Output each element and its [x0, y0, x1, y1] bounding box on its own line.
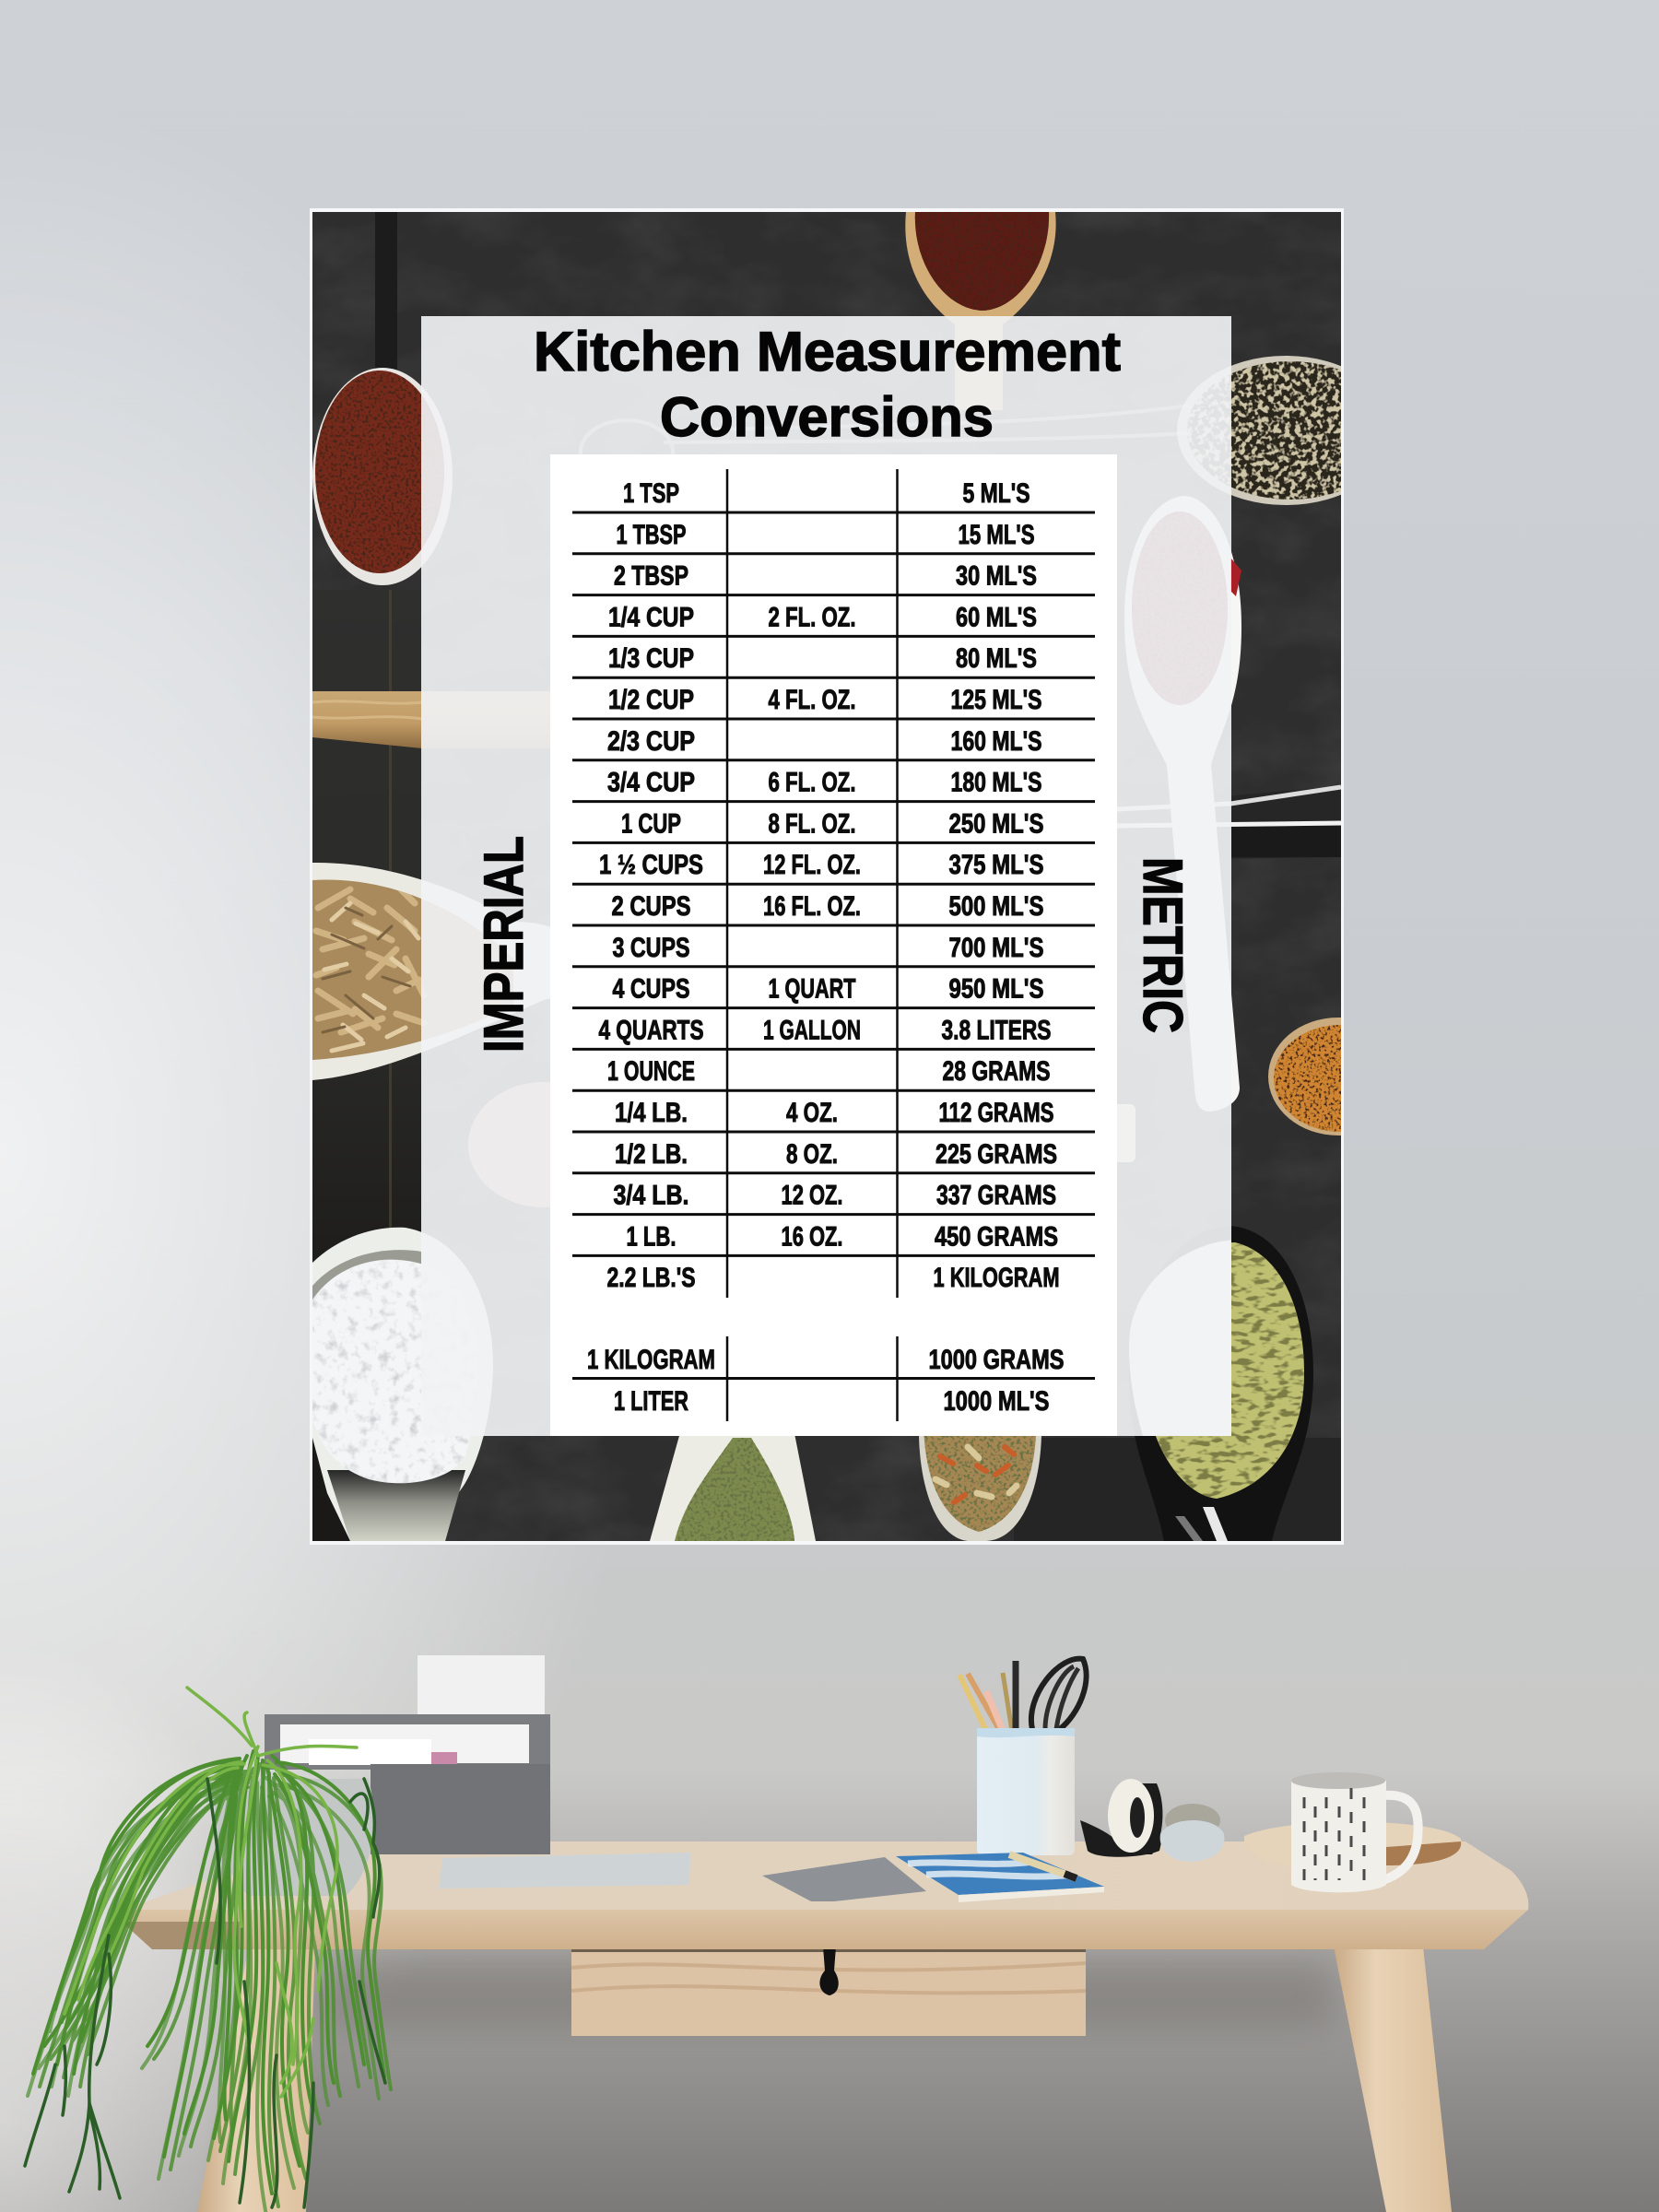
icon: plant pot: [215, 1779, 374, 1896]
conversion table: imperial column: 1/2 LB.: [615, 1139, 688, 1170]
conversion table: imperial column: [587, 478, 715, 1417]
conversion table: metric column: 950 ML'S: [949, 974, 1043, 1005]
conversion table: middle column: 8 FL. OZ.: [769, 808, 855, 839]
conversion table: middle column: 12 OZ.: [782, 1181, 842, 1211]
desk top surface: [122, 1841, 1528, 1910]
conversion table: metric column: 60 ML'S: [956, 602, 1037, 632]
icon: pen cup with pencils and scissors: [959, 1659, 1087, 1855]
conversion table: metric column: 112 GRAMS: [938, 1098, 1054, 1128]
title: [534, 321, 1121, 448]
icon: speckled mug: [1291, 1772, 1418, 1892]
conversion table: middle column: 6 FL. OZ.: [769, 768, 855, 798]
conversion table: imperial column: 2 CUPS: [612, 891, 691, 922]
icon: red chilli sliver: [1230, 558, 1241, 596]
desk: [122, 1841, 1528, 2212]
conversion table: imperial column: 2 TBSP: [614, 561, 688, 592]
conversion table: metric column: 250 ML'S: [949, 808, 1043, 839]
icon: wooden spoon, top: [905, 212, 1056, 410]
icon: glass paperweight: [1160, 1804, 1224, 1862]
conversion table: metric column: 28 GRAMS: [942, 1056, 1051, 1087]
conversion table: middle column: 4 OZ.: [786, 1098, 838, 1128]
icon: pink salt bowl behind panel: [468, 1082, 550, 1207]
conversion table: middle column: 12 FL. OZ.: [763, 850, 861, 880]
drawer: [571, 1947, 1086, 2036]
conversion table: metric column: 30 ML'S: [956, 561, 1037, 592]
conversion table: imperial column: 2.2 LB.'S: [606, 1263, 695, 1293]
conversion table: imperial column: 1 ½ CUPS: [599, 850, 703, 880]
title: Conversions: [660, 386, 994, 448]
icon: loose paper on desk: [439, 1853, 690, 1888]
conversion table: imperial column: 1/3 CUP: [608, 643, 694, 674]
conversion table: metric column: 160 ML'S: [951, 726, 1041, 757]
icon: mixed vegetable spoon, bottom: [919, 1436, 1041, 1541]
conversion table: imperial column: 2/3 CUP: [607, 726, 695, 757]
side label: metric: METRIC: [1132, 857, 1194, 1033]
desk front edge: [122, 1910, 1528, 1949]
poster frame: [310, 208, 1408, 1545]
icon: green spice dark spoon, right: [1129, 1226, 1313, 1541]
poster photo: spoons on slate: [312, 212, 1408, 1541]
conversion table: middle column: 8 OZ.: [786, 1139, 838, 1170]
conversion table: metric column: 80 ML'S: [956, 643, 1037, 674]
conversion table: imperial column: 1 CUP: [621, 808, 681, 839]
icon: round wooden tray: [1244, 1822, 1462, 1866]
icon: blue striped notebook: [762, 1853, 1104, 1902]
conversion table: imperial column: 1 TSP: [623, 478, 679, 509]
conversion table: imperial column: 1 LB.: [627, 1221, 677, 1252]
conversion table: metric column: 180 ML'S: [951, 768, 1041, 798]
conversion table: metric column: 1 KILOGRAM: [933, 1263, 1060, 1293]
shadow under desk: [313, 1959, 1336, 2028]
conversion table: imperial column: 1/2 CUP: [608, 685, 694, 715]
conversion table: imperial column: 1/4 LB.: [615, 1098, 688, 1128]
icon: black spoon handle: [375, 212, 397, 387]
translucent content panel: [421, 316, 1231, 1436]
side label: imperial: IMPERIAL: [473, 836, 535, 1053]
conversion table grid: [572, 469, 1095, 1421]
conversion table: metric column: 15 ML'S: [959, 520, 1034, 550]
icon: white spoon with red spice: [1124, 496, 1241, 1112]
conversion table: imperial column: 3/4 LB.: [614, 1181, 689, 1211]
icon: orange spice spoon, right: [1268, 1018, 1341, 1135]
conversion table: imperial column: 1 KILOGRAM: [587, 1345, 715, 1375]
conversion table: metric column: 375 ML'S: [949, 850, 1043, 880]
icon: metal tongs, right: [1106, 786, 1341, 859]
icon: peppercorn bowl, right: [1177, 356, 1341, 505]
icon: herb spoon, bottom: [650, 1436, 816, 1541]
icon: cream block behind panel: [1117, 1104, 1135, 1162]
conversion table: middle column: 1 GALLON: [763, 1015, 861, 1045]
conversion table: middle column: [763, 602, 861, 1252]
icon: grey file organizer: [265, 1655, 550, 1854]
icon: wooden spoon handle, left: [312, 691, 553, 748]
conversion table: middle column: 16 OZ.: [782, 1221, 842, 1252]
conversion table: imperial column: 3 CUPS: [612, 933, 689, 963]
conversion table: metric column: 337 GRAMS: [936, 1181, 1056, 1211]
conversion table: imperial column: 1 LITER: [614, 1386, 688, 1417]
conversion table: metric column: 125 ML'S: [951, 685, 1041, 715]
conversion table: imperial column: 1 TBSP: [616, 520, 686, 550]
conversion table: imperial column: 4 QUARTS: [599, 1015, 704, 1045]
desk underside left: [122, 1922, 240, 1949]
conversion table: imperial column: 1 OUNCE: [607, 1056, 695, 1087]
icon: hanging spider plant: [25, 1688, 391, 2212]
conversion table: imperial column: 1/4 CUP: [608, 602, 694, 632]
white table panel: [550, 454, 1117, 1436]
icon: faint whisk behind panel: [581, 406, 1189, 483]
conversion table: metric column: 1000 GRAMS: [929, 1345, 1064, 1375]
conversion table: metric column: 500 ML'S: [949, 891, 1043, 922]
conversion table: metric column: 3.8 LITERS: [942, 1015, 1051, 1045]
conversion table: middle column: 16 FL. OZ.: [763, 891, 861, 922]
conversion table: middle column: 1 QUART: [769, 974, 855, 1005]
icon: red spice spoon, left: [312, 368, 453, 585]
icon: white spoon caraway bowl, left: [312, 863, 550, 1080]
icon: tape dispenser: [1080, 1779, 1163, 1857]
conversion table: imperial column: 3/4 CUP: [607, 768, 695, 798]
icon: white salt spoon, bottom left: [312, 1228, 493, 1541]
conversion table: middle column: 2 FL. OZ.: [769, 602, 855, 632]
conversion table: metric column: [929, 478, 1064, 1417]
desk legs: [197, 1947, 1452, 2212]
conversion table: metric column: 450 GRAMS: [935, 1221, 1058, 1252]
conversion table: imperial column: 4 CUPS: [612, 974, 689, 1005]
conversion table: metric column: 5 ML'S: [962, 478, 1030, 509]
conversion table: metric column: 225 GRAMS: [935, 1139, 1057, 1170]
conversion table: metric column: 700 ML'S: [949, 933, 1043, 963]
conversion table: middle column: 4 FL. OZ.: [769, 685, 855, 715]
title: Kitchen Measurement: [534, 321, 1121, 382]
conversion table: metric column: 1000 ML'S: [944, 1386, 1049, 1417]
